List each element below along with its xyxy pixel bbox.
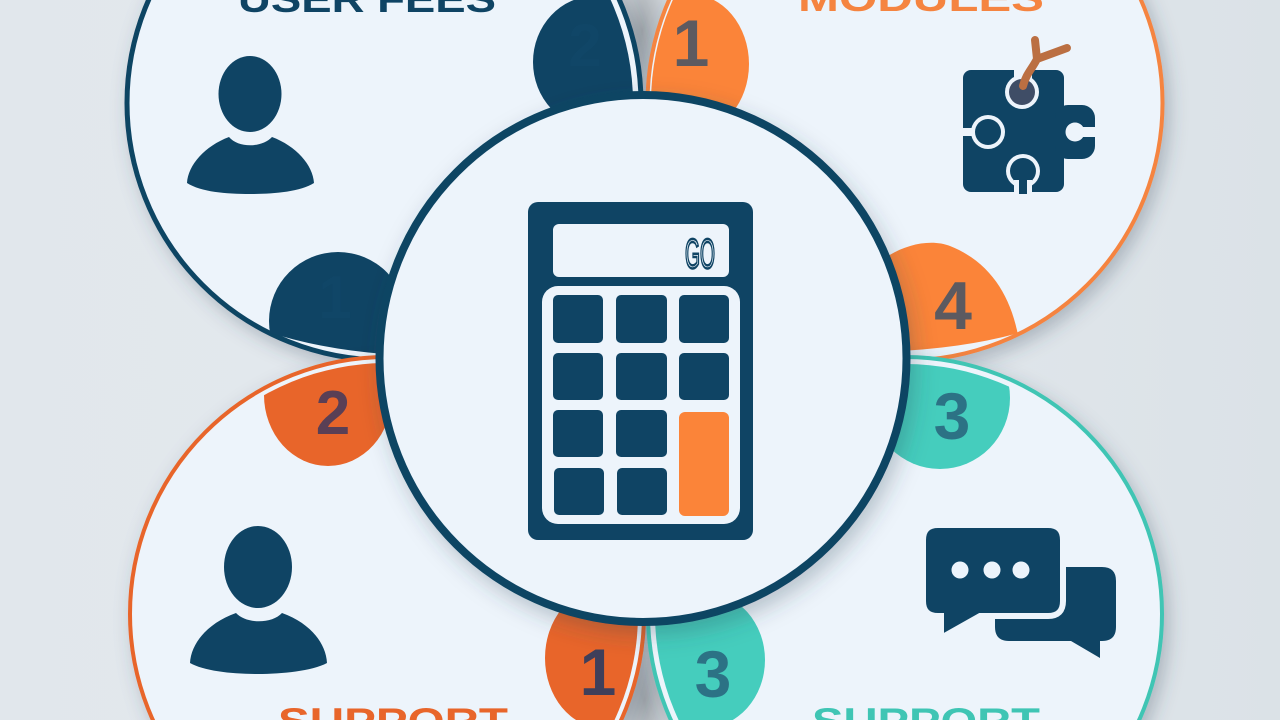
- calculator display: GO: [685, 230, 715, 277]
- icon: user: [187, 56, 314, 194]
- calculator display: [553, 224, 729, 277]
- petal: number 4: [890, 242, 1018, 350]
- panel: support teal: [643, 327, 1162, 720]
- panel: user fees: [127, 0, 657, 390]
- petal: number 1: [545, 612, 638, 720]
- petal: lower number 1: 1: [318, 264, 352, 331]
- panel: support orange: [130, 324, 661, 720]
- panel: center calculator disc: [380, 95, 906, 622]
- petal: number 4: 4: [934, 268, 972, 344]
- calculator keypad: [542, 286, 740, 524]
- icon: person: [190, 526, 327, 674]
- icon: puzzle piece: [960, 40, 1097, 194]
- panel: modules: [631, 0, 1162, 365]
- petal: upper number 2: 2: [568, 12, 602, 79]
- petal: number 2: 2: [316, 379, 350, 448]
- icon: chat bubbles: [923, 525, 1116, 658]
- petal: upper number 3: 3: [934, 379, 970, 453]
- petal: upper number 3: [894, 364, 1010, 469]
- petal: number 2: [264, 363, 385, 466]
- petal: number 1: 1: [580, 635, 616, 709]
- petal: lower number 1: [269, 252, 389, 354]
- petal: lower number 3: 3: [695, 637, 731, 711]
- petal: lower number 3: [655, 607, 765, 720]
- icon: calculator: [528, 202, 753, 540]
- petal: upper number 2: [533, 0, 633, 108]
- petal: number 1: 1: [673, 6, 709, 80]
- petal: number 1: [651, 0, 749, 108]
